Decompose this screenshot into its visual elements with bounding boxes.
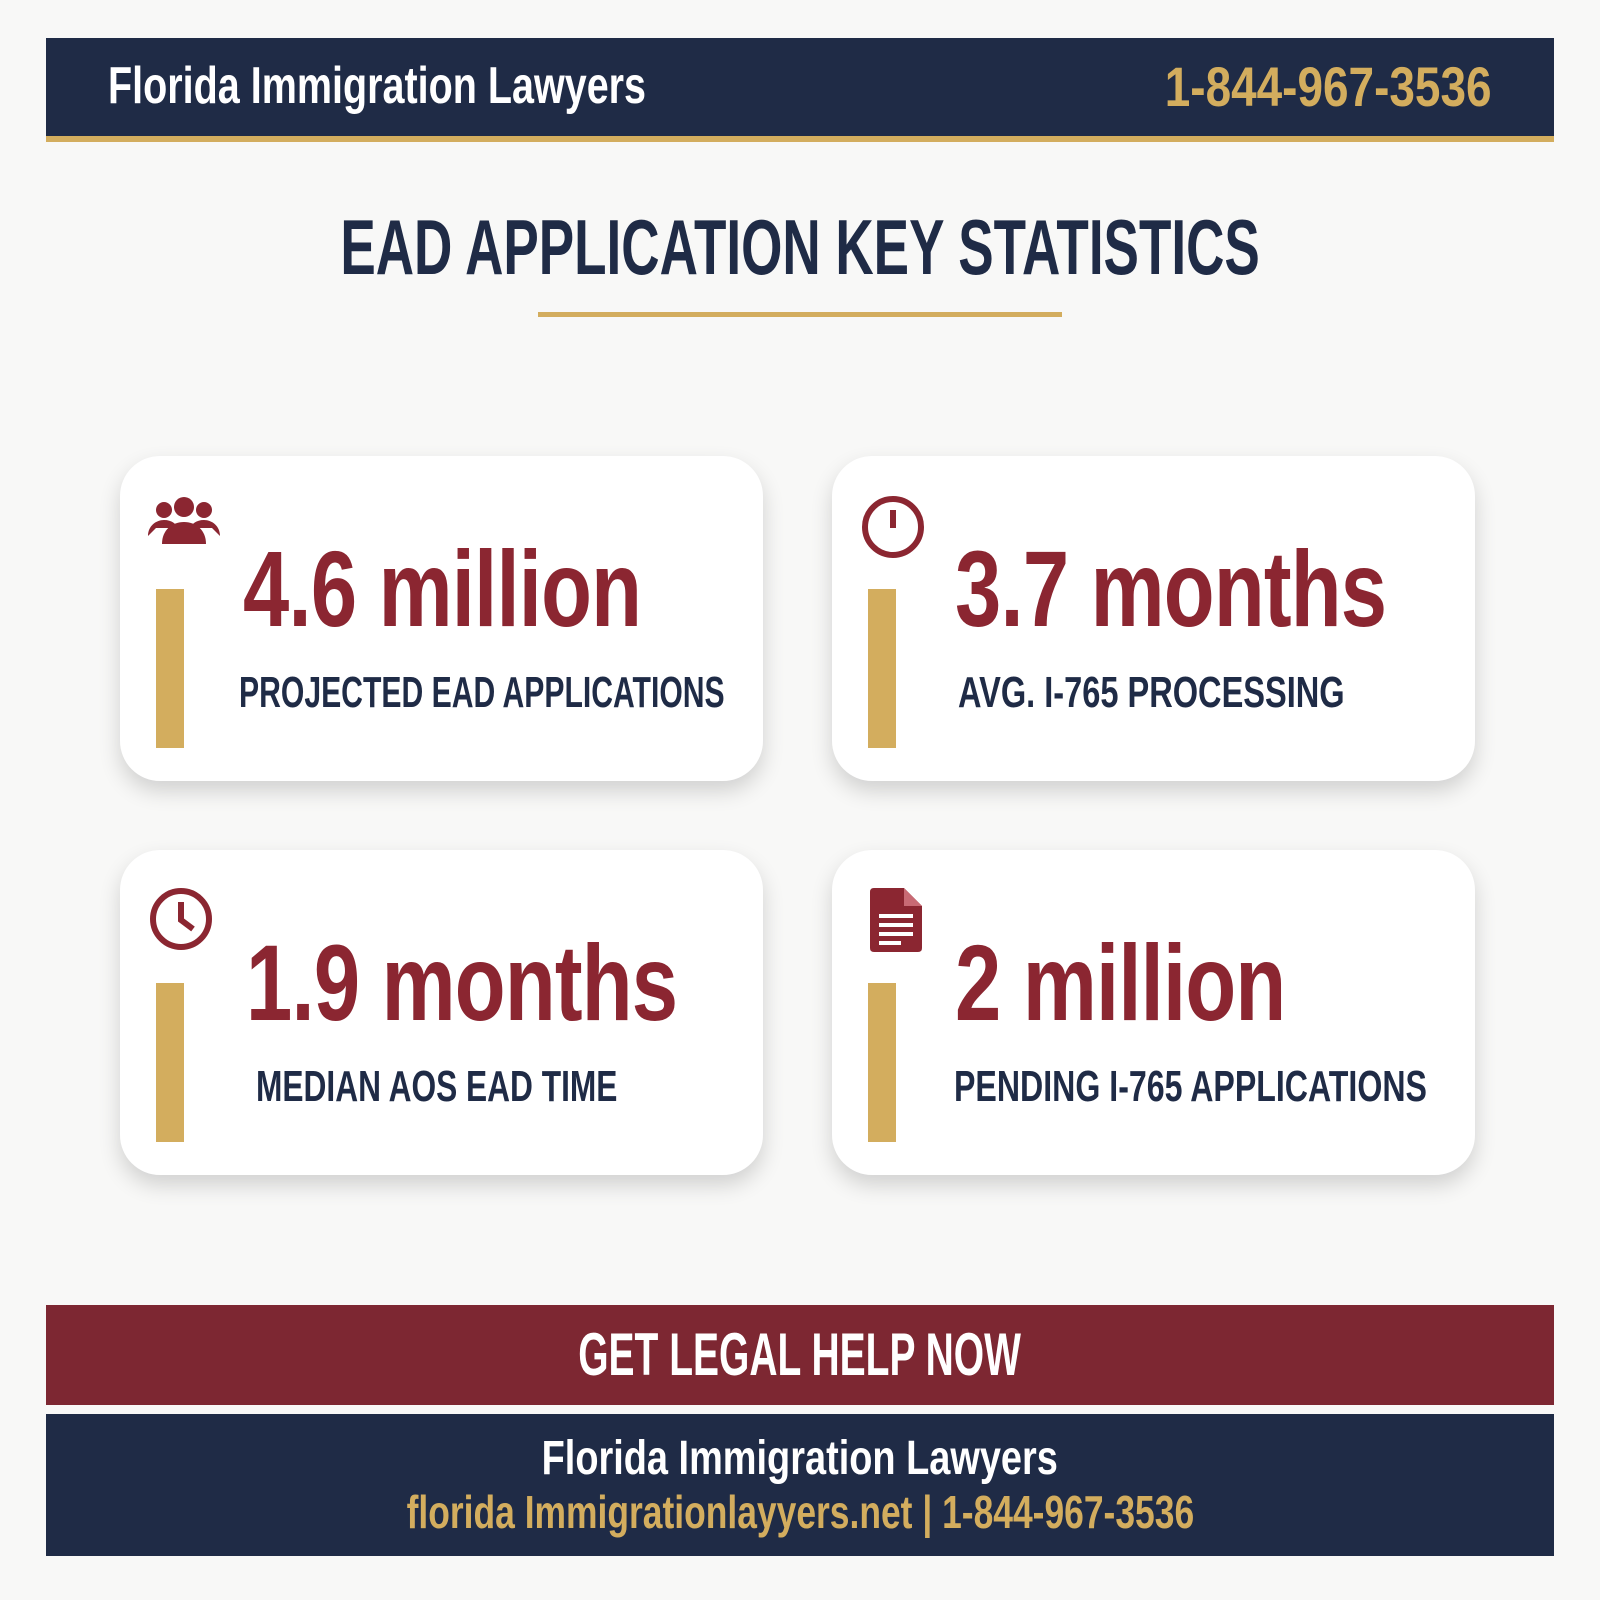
card: processing time [832, 456, 1475, 781]
title underline [538, 312, 1062, 317]
card: median AOS [120, 850, 763, 1175]
stat number: 1.9 months [246, 922, 677, 1043]
stat label: PENDING I-765 APPLICATIONS [954, 1062, 1427, 1111]
stat label: AVG. I-765 PROCESSING [958, 668, 1345, 717]
header phone: 1-844-967-3536 [1165, 55, 1492, 118]
title: EAD APPLICATION KEY STATISTICS [340, 203, 1260, 291]
icon: stopwatch [862, 496, 924, 558]
stat label: PROJECTED EAD APPLICATIONS [239, 668, 725, 717]
footer [46, 1414, 1554, 1556]
stat number: 4.6 million [243, 528, 641, 649]
call to action banner: GET LEGAL HELP NOW [579, 1321, 1021, 1388]
stat number: 2 million [955, 922, 1285, 1043]
header firm name: Florida Immigration Lawyers [108, 57, 646, 115]
icon: people [148, 497, 220, 544]
card: pending applications [832, 850, 1475, 1175]
icon: document [870, 888, 922, 952]
stat number: 3.7 months [955, 528, 1386, 649]
header bar [46, 38, 1554, 142]
footer firm name: Florida Immigration Lawyers [542, 1432, 1058, 1485]
card: projected applications [120, 456, 763, 781]
footer contact: florida Immigrationlayyers.net | 1-844-967-3536 [406, 1486, 1194, 1538]
icon: clock [150, 888, 212, 950]
call to action banner [46, 1305, 1554, 1405]
stat label: MEDIAN AOS EAD TIME [256, 1062, 617, 1111]
